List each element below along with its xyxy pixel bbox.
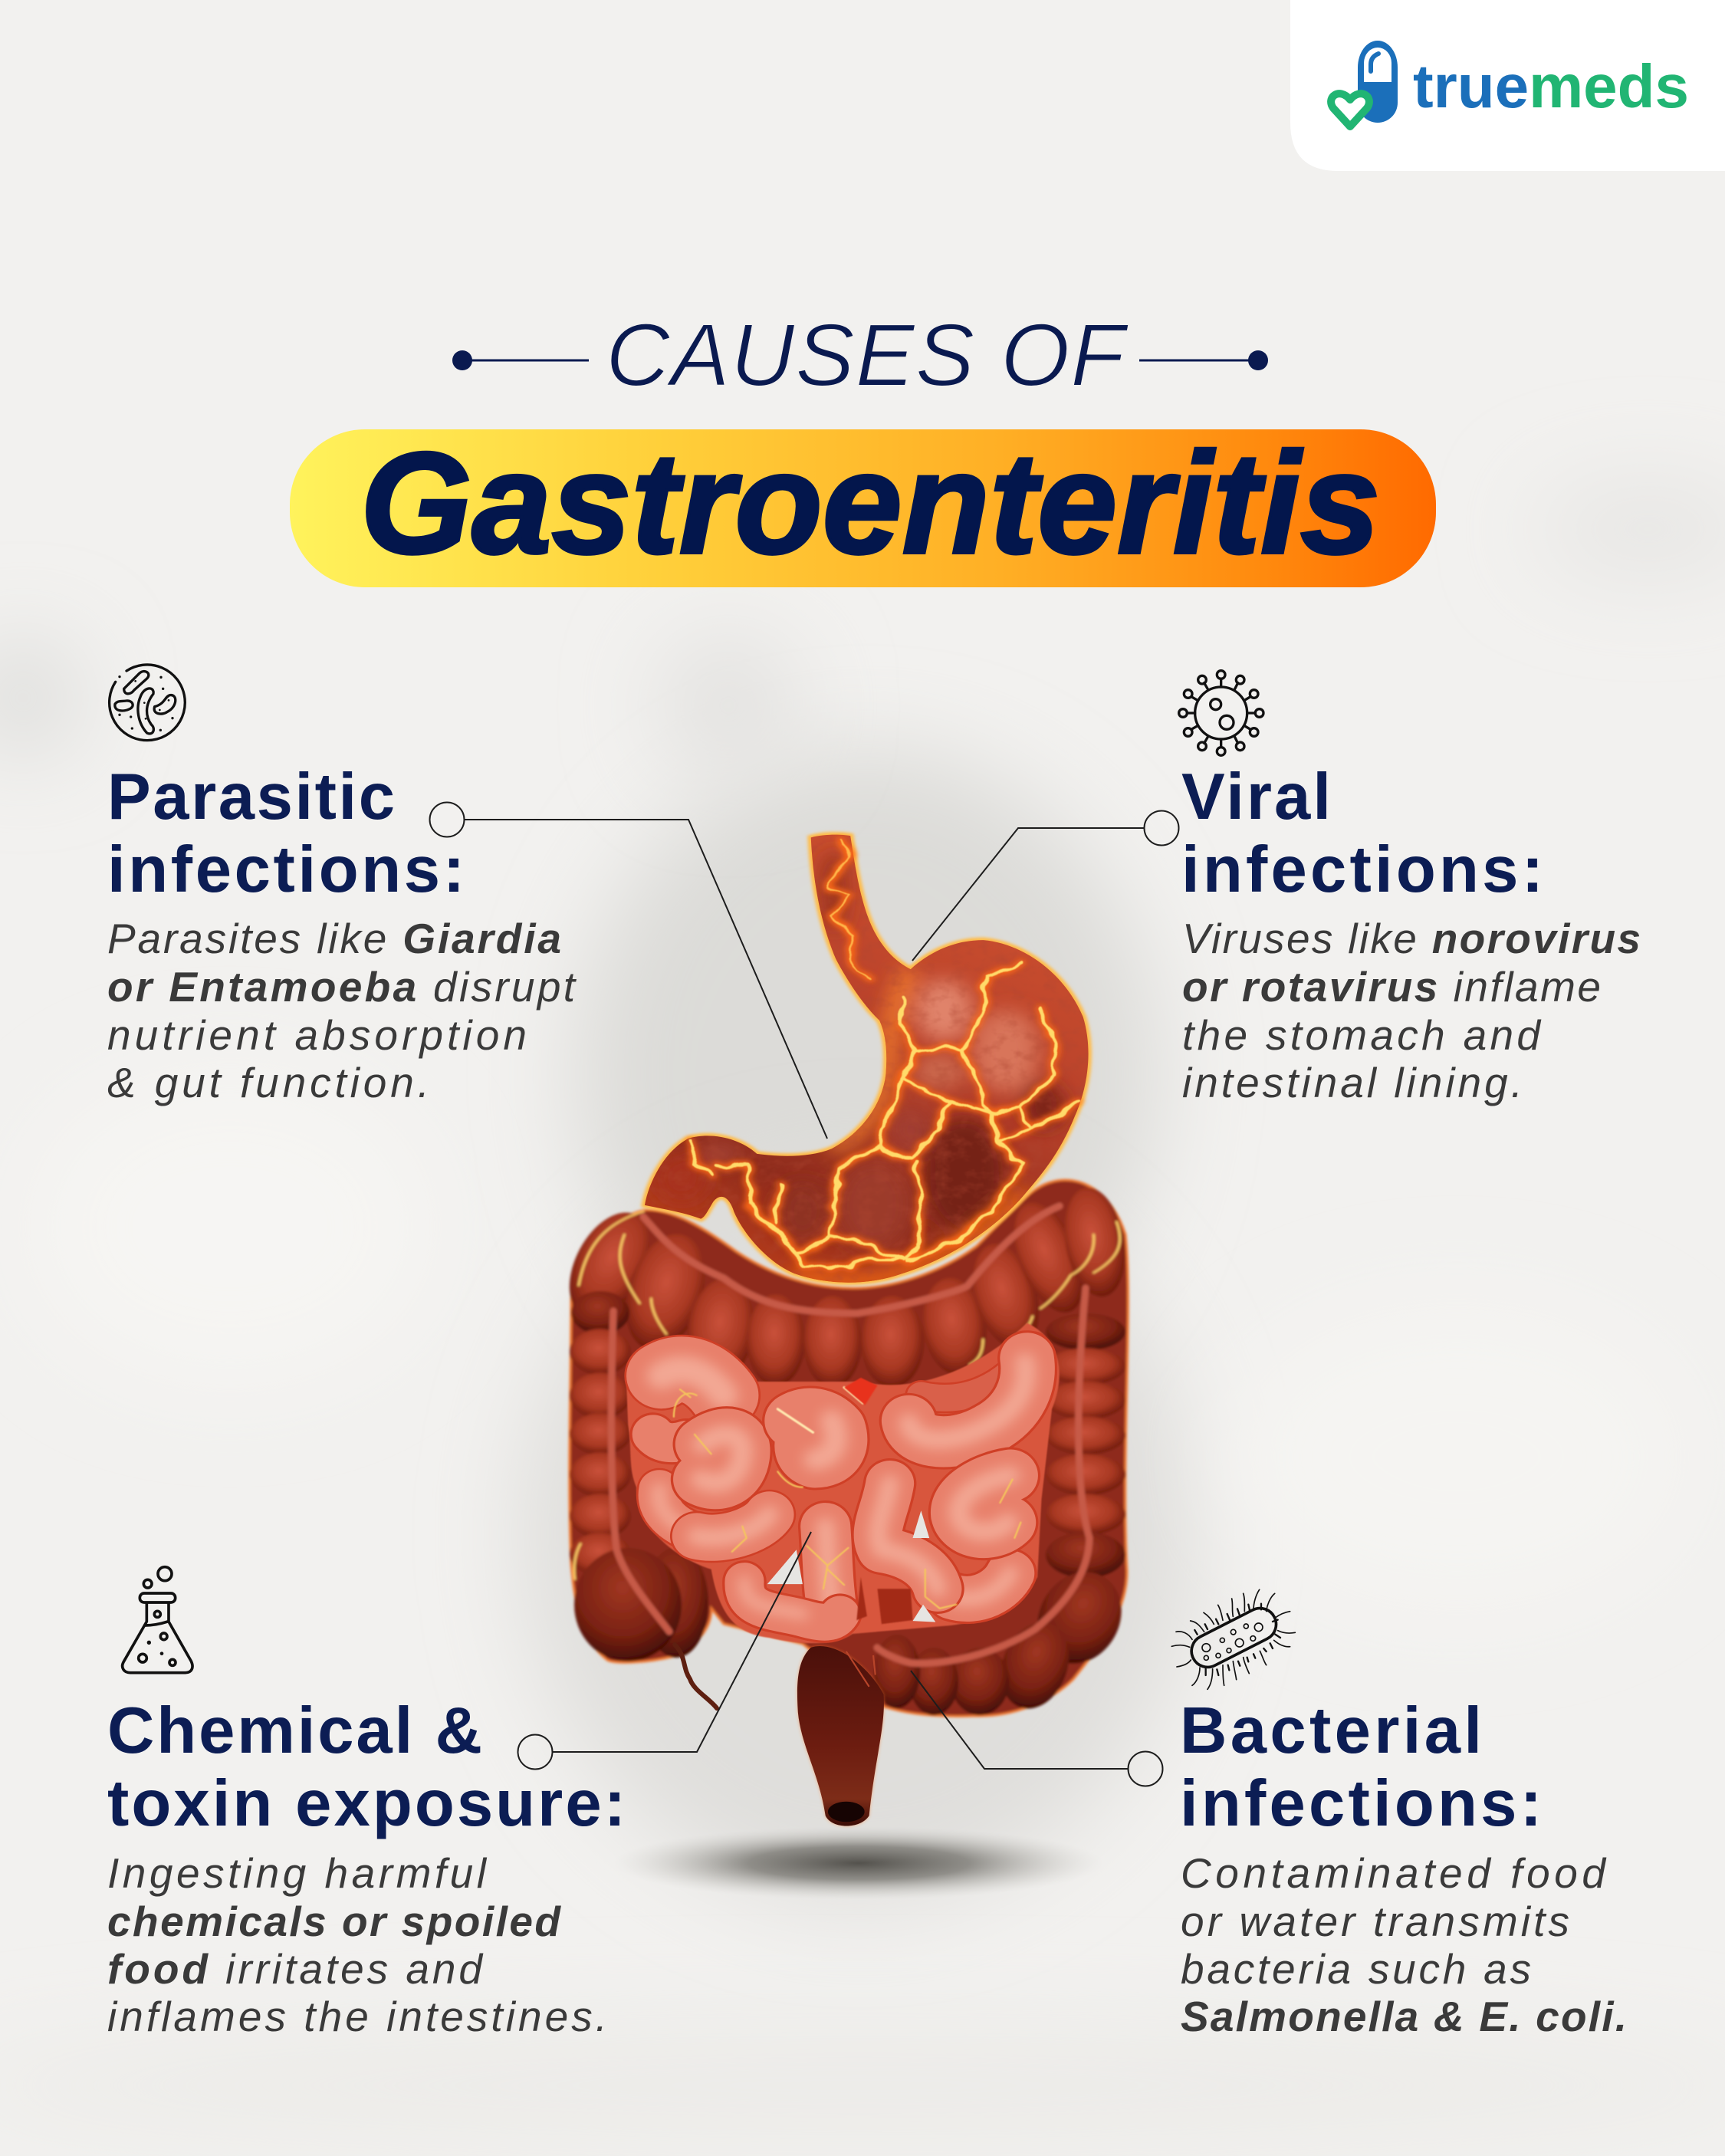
coil: large right band bbox=[909, 1358, 1028, 1441]
panel: parasitic infections bbox=[107, 665, 577, 1106]
colon band bbox=[611, 1206, 1089, 1663]
leader line: bacterial bbox=[911, 1671, 1162, 1786]
appendix bbox=[675, 1645, 717, 1708]
heading: Viral bbox=[1181, 761, 1331, 833]
icon: capsule with heart bbox=[1331, 41, 1398, 127]
icon: parasite bbox=[110, 665, 185, 741]
rectum bbox=[797, 1646, 884, 1826]
coil: left lower stack bbox=[659, 1435, 770, 1538]
stomach cracks bbox=[691, 840, 1077, 1270]
logo wordmark: truemeds bbox=[1413, 52, 1689, 120]
heading: Parasitic bbox=[107, 761, 395, 833]
description: Ingesting harmful bbox=[107, 1849, 488, 1897]
title pill: gastroenteritis: Gastroenteritis bbox=[360, 422, 1380, 583]
icon: flask bbox=[123, 1567, 192, 1673]
floating shadow bbox=[613, 1826, 1104, 1900]
coil: upper right band bbox=[921, 1346, 1033, 1398]
leader line: parasitic bbox=[429, 802, 827, 1139]
panel: chemical and toxin exposure bbox=[107, 1567, 626, 2040]
description: or Entamoeba disrupt bbox=[107, 963, 577, 1011]
description bbox=[1181, 1849, 1627, 2040]
leader line: viral bbox=[912, 811, 1179, 961]
title line: causes of bbox=[452, 305, 1268, 405]
heading line 2: infections: bbox=[107, 833, 465, 906]
stomach cracks glow bbox=[691, 840, 1077, 1270]
description: Salmonella & E. coli. bbox=[1181, 1993, 1627, 2040]
heading line 2: infections: bbox=[1181, 833, 1543, 906]
heading line 2: toxin exposure: bbox=[107, 1767, 626, 1840]
description: or water transmits bbox=[1181, 1898, 1569, 1945]
icon: virus bbox=[1179, 671, 1263, 755]
description bbox=[1182, 915, 1641, 1106]
description bbox=[107, 1849, 607, 2040]
colon highlights bbox=[574, 1211, 1120, 1579]
small intestine bbox=[626, 1323, 1060, 1643]
coil: lower middle bbox=[744, 1527, 840, 1622]
icon: bacterium bbox=[1171, 1589, 1295, 1689]
panel: bacterial infections bbox=[1171, 1589, 1627, 2040]
heading: Chemical & bbox=[107, 1694, 482, 1767]
description: Parasites like Giardia bbox=[107, 915, 561, 962]
description: or rotavirus inflame bbox=[1182, 963, 1601, 1011]
description: the stomach and bbox=[1182, 1011, 1542, 1059]
description: bacteria such as bbox=[1181, 1945, 1531, 1993]
heading line 2: infections: bbox=[1180, 1767, 1542, 1840]
coil: central loop bbox=[794, 1416, 838, 1460]
leader line: chemical bbox=[518, 1532, 811, 1770]
description: food irritates and bbox=[107, 1945, 484, 1993]
coil: upper left bbox=[653, 1369, 724, 1443]
colon bbox=[553, 1180, 1138, 1718]
description bbox=[107, 915, 577, 1106]
stomach bbox=[629, 828, 1104, 1283]
logo panel bbox=[1290, 0, 1725, 171]
description: Viruses like norovirus bbox=[1182, 915, 1641, 962]
description: chemicals or spoiled bbox=[107, 1898, 561, 1945]
panel: viral infections bbox=[1179, 671, 1641, 1106]
coil: lower right stack bbox=[952, 1475, 1010, 1599]
heading: Bacterial bbox=[1180, 1694, 1482, 1767]
description: Contaminated food bbox=[1181, 1849, 1607, 1897]
description: & gut function. bbox=[107, 1059, 429, 1106]
title line: causes of: CAUSES OF bbox=[606, 305, 1129, 405]
intestine veins bbox=[674, 1388, 1020, 1609]
illustration: digestive system bbox=[553, 828, 1138, 1900]
description: inflames the intestines. bbox=[107, 1993, 607, 2040]
coil: diagonal middle bbox=[878, 1484, 938, 1589]
description: nutrient absorption bbox=[107, 1011, 527, 1059]
description: intestinal lining. bbox=[1182, 1059, 1523, 1106]
